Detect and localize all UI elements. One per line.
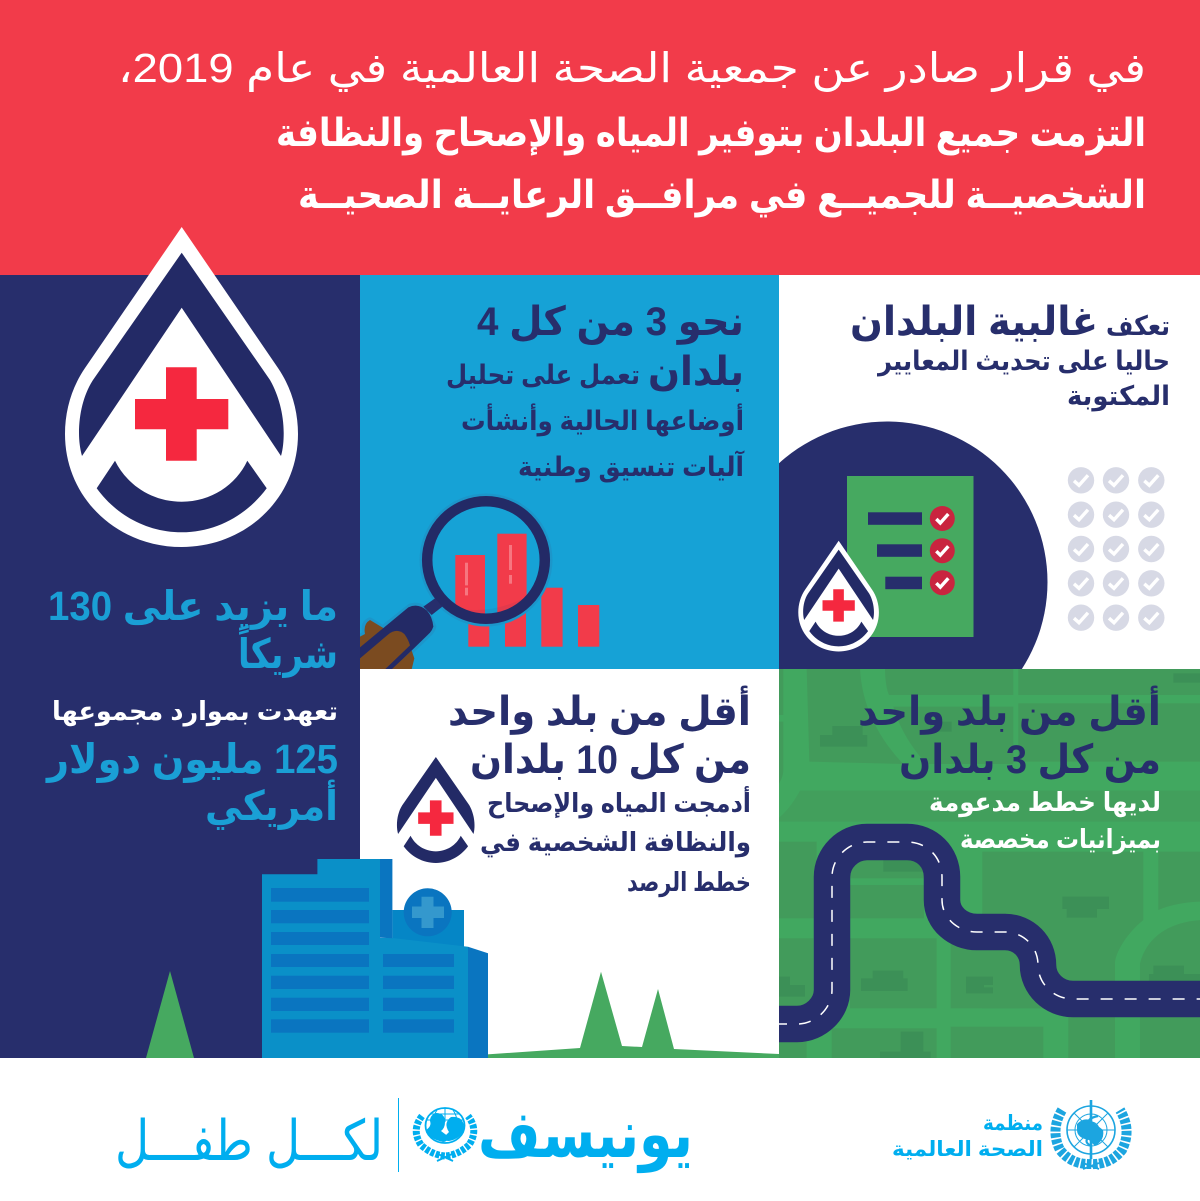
monitoring text: والنظافة الشخصية في bbox=[480, 827, 751, 858]
UNICEF wordmark: يونيسف bbox=[478, 1097, 693, 1174]
icon: grey check grid bbox=[1068, 467, 1165, 631]
icon: large water drop with cross bbox=[65, 227, 298, 547]
hand holding handle bbox=[360, 598, 442, 670]
tree bbox=[146, 971, 194, 1058]
partners headline: ما يزيد على 130 bbox=[48, 583, 338, 630]
coordination headline bbox=[477, 300, 744, 394]
budgets headline: أقل من بلد واحد bbox=[858, 685, 1161, 735]
bar chart under magnifier bbox=[360, 494, 599, 670]
coordination headline: بلدان bbox=[648, 350, 744, 394]
monitoring text bbox=[480, 786, 751, 898]
coordination text bbox=[446, 360, 745, 483]
WHO wordmark: الصحة العالمية bbox=[892, 1138, 1043, 1161]
standards text: المكتوبة bbox=[1067, 381, 1170, 412]
icon: navy circle with checklist bbox=[779, 422, 1048, 669]
WHO wordmark: منظمة bbox=[983, 1112, 1043, 1135]
panel: budgets bbox=[775, 668, 1200, 1060]
panel: coordination bbox=[360, 275, 779, 670]
partners headline bbox=[48, 583, 338, 678]
icon: small drop bbox=[798, 541, 879, 651]
budgets headline bbox=[858, 685, 1161, 783]
divider bbox=[398, 1098, 399, 1172]
monitoring headline: من كل 10 بلدان bbox=[470, 738, 751, 783]
monitoring text: أدمجت المياه والإصحاح bbox=[487, 786, 751, 819]
header band bbox=[0, 0, 1200, 275]
panel: monitoring bbox=[360, 669, 779, 1058]
WHO wordmark bbox=[892, 1112, 1043, 1161]
budgets text bbox=[929, 787, 1161, 855]
standards headline: تعكف bbox=[1106, 311, 1170, 341]
budgets text: لديها خطط مدعومة bbox=[929, 787, 1161, 818]
magnifier bbox=[360, 494, 563, 670]
icon: hospital building bbox=[262, 859, 488, 1058]
icon: drop in panel bbox=[392, 747, 480, 869]
road bbox=[775, 842, 1200, 1024]
budgets text: بميزانيات مخصصة bbox=[960, 824, 1161, 855]
partners amount: أمريكي bbox=[205, 779, 338, 830]
panel: written standards bbox=[779, 304, 1168, 669]
header line 1: في قرار صادر عن جمعية الصحة العالمية في عام 2019، bbox=[118, 45, 1146, 93]
standards text bbox=[876, 346, 1170, 412]
budgets headline: من كل 3 بلدان bbox=[899, 738, 1161, 783]
partners headline: شريكاً bbox=[238, 625, 338, 678]
monitoring headline bbox=[448, 685, 751, 783]
icon: UNICEF emblem bbox=[416, 1108, 474, 1161]
coordination text: أوضاعها الحالية وأنشأت bbox=[461, 403, 744, 437]
icon: WHO emblem bbox=[1055, 1100, 1127, 1169]
standards text: حاليا على تحديث المعايير bbox=[876, 346, 1170, 377]
standards headline: غالبية البلدان bbox=[850, 300, 1098, 344]
coordination text: آليات تنسيق وطنية bbox=[518, 450, 745, 483]
ground and trees bbox=[435, 972, 779, 1058]
map blocks bbox=[778, 668, 1200, 1060]
coordination headline: نحو 3 من كل 4 bbox=[477, 300, 744, 345]
footer bbox=[0, 1058, 1200, 1201]
monitoring headline: أقل من بلد واحد bbox=[448, 685, 751, 735]
partners amount: 125 مليون دولار bbox=[45, 736, 338, 784]
UNICEF tagline: لكـــل طفـــل bbox=[115, 1109, 383, 1172]
monitoring text: خطط الرصد bbox=[627, 867, 751, 898]
panel: partners bbox=[0, 275, 360, 1058]
coordination text: تعمل على تحليل bbox=[446, 360, 640, 390]
partners amount bbox=[45, 736, 338, 830]
partners subtext: تعهدت بموارد مجموعها bbox=[52, 696, 338, 727]
